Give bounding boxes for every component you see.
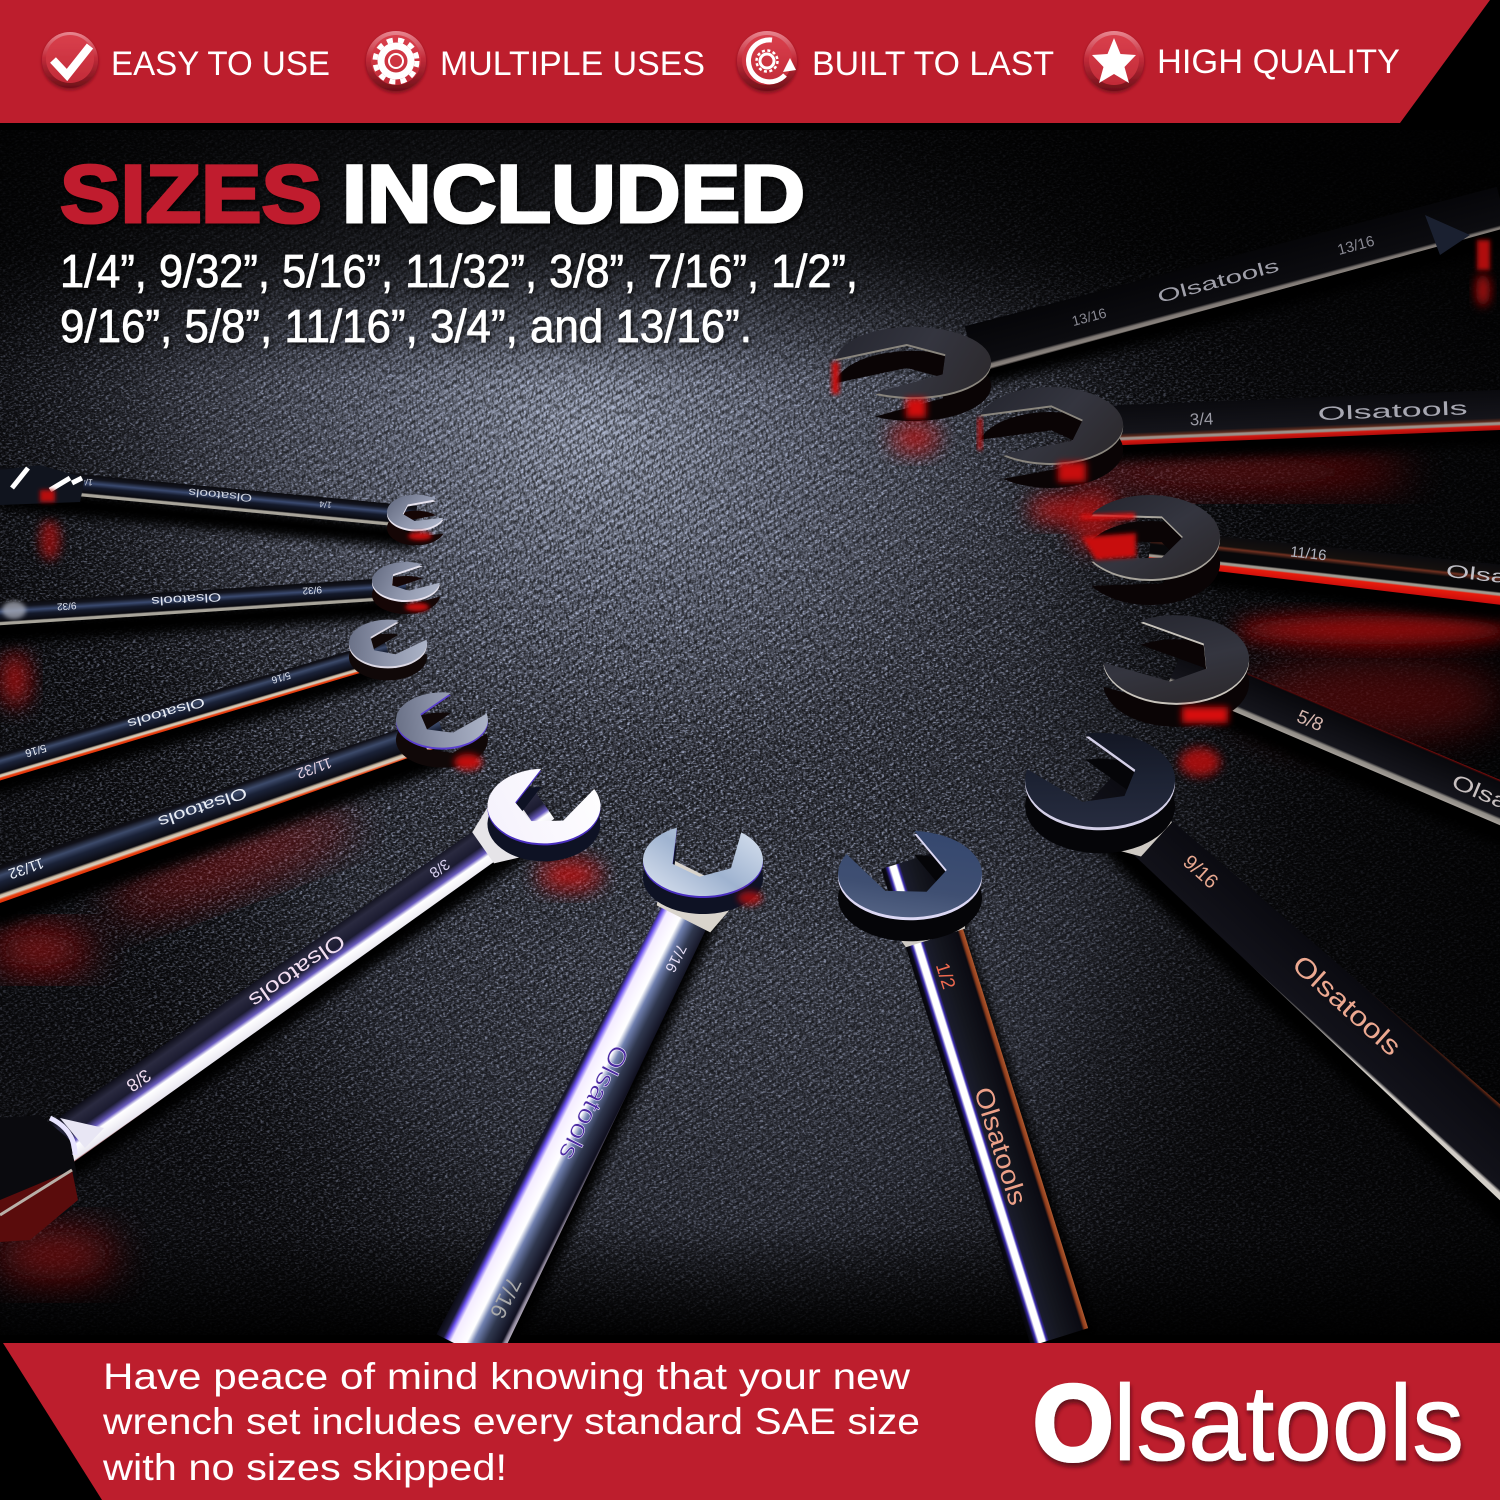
bottom banner: [3, 1343, 1500, 1500]
wrench 3/4: [970, 378, 1500, 496]
icon: star: [1084, 31, 1144, 91]
text block: peace of mind message: [102, 1356, 920, 1488]
wrench 3/4: Olsatools: [1317, 398, 1468, 425]
wrench 11/32: 11/32: [6, 854, 46, 882]
heading: sizes included: SIZES: [60, 149, 322, 240]
text block: peace of mind message: Have peace of mind knowing that your new: [103, 1356, 910, 1397]
icon: gear: [366, 31, 426, 91]
wrench 7/16: 7/16: [485, 1273, 526, 1323]
wrench 9/16: [1002, 719, 1500, 1238]
wrench 9/16: 9/16: [1178, 851, 1222, 893]
wrench 13/16: 13/16: [1336, 233, 1376, 259]
text block: peace of mind message: wrench set includes every standard SAE size: [102, 1401, 920, 1442]
top banner: [0, 0, 1490, 123]
wrench 1/4: [0, 465, 447, 549]
wrench 11/32: [0, 684, 502, 929]
wrench 5/16: 5/16: [270, 669, 292, 685]
red glow reflections on the mat: [0, 424, 1500, 1279]
wrench 1/4: 1/4: [80, 476, 93, 487]
text block: list of sizes: [60, 245, 858, 352]
wrench 3/8: [0, 760, 617, 1242]
wrench 1/2: 1/2: [931, 960, 959, 992]
heading: sizes included: [60, 149, 805, 240]
label: multiple uses: MULTIPLE USES: [440, 45, 705, 83]
wrench 13/16: [819, 184, 1500, 431]
label: high quality: HIGH QUALITY: [1157, 43, 1400, 81]
wrench 3/4: 3/4: [1189, 409, 1214, 429]
wrench 5/8: 5/8: [1294, 706, 1326, 736]
wrench 1/2: [818, 821, 1100, 1355]
wrench 7/16: [429, 826, 769, 1375]
wrench 9/32: Olsatools: [151, 590, 222, 608]
wrench 13/16: 13/16: [1070, 304, 1108, 329]
wrench 3/8: 3/8: [426, 855, 453, 881]
wrench 9/32: 9/32: [302, 583, 322, 596]
wrench 7/16: Olsatools: [553, 1040, 634, 1165]
wrench 5/16: Olsatools: [125, 694, 207, 732]
text block: list of sizes: 9/16”, 5/8”, 11/16”, 3/4”, and 13/16”.: [60, 300, 752, 352]
wrench 5/16: [0, 612, 438, 799]
label: easy to use: EASY TO USE: [111, 45, 330, 83]
text block: list of sizes: 1/4”, 9/32”, 5/16”, 11/32”, 3/8”, 7/16”, 1/2”,: [60, 245, 858, 297]
icon: check mark: [42, 32, 98, 88]
wrench 11/16: 11/16: [1289, 543, 1327, 564]
wrench 13/16: Olsatools: [1155, 255, 1281, 307]
heading: sizes included: INCLUDED: [342, 149, 805, 240]
wrench 3/8: 3/8: [123, 1065, 155, 1096]
icon: gear with cycle arrow: [737, 31, 797, 91]
wrench 5/16: 5/16: [24, 741, 48, 759]
wrench 9/16: Olsatools: [1287, 949, 1407, 1062]
wrench 11/32: 11/32: [294, 754, 334, 782]
wrench 9/32: [0, 557, 447, 645]
wrench 9/32: 9/32: [56, 599, 77, 612]
label: built to last: BUILT TO LAST: [812, 45, 1054, 83]
wrench 1/4: Olsatools: [187, 485, 253, 503]
wrench 5/8: [1088, 603, 1500, 852]
wrench 1/4: 1/4: [319, 499, 332, 510]
logo: Olsatools: Olsatools: [1033, 1362, 1464, 1483]
wrench 3/8: Olsatools: [244, 929, 349, 1012]
wrench 1/2: Olsatools: [968, 1083, 1033, 1209]
wrench 11/32: Olsatools: [156, 783, 249, 830]
wrench 11/16: [1080, 495, 1500, 621]
text block: peace of mind message: with no sizes skipped!: [102, 1447, 507, 1488]
wrench 7/16: 7/16: [661, 941, 690, 975]
